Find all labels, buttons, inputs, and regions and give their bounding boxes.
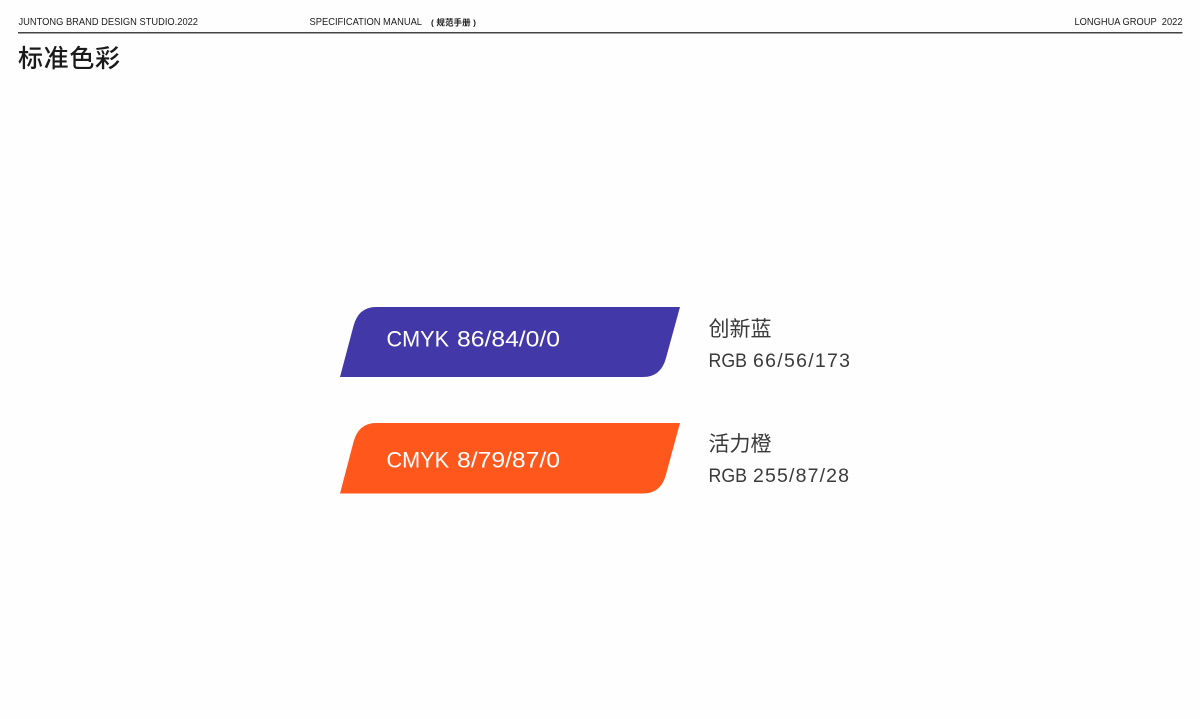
header text: studio: JUNTONG BRAND DESIGN STUDIO.2022 [18, 17, 198, 28]
title: 标准色彩 [18, 39, 120, 75]
RGB value: orange: RGB [708, 465, 747, 487]
header: top bar [18, 17, 1183, 34]
header text: manual Chinese: ( 规范手册 ) [431, 18, 476, 28]
panel: innovation blue swatch [340, 307, 680, 377]
text block: blue name and RGB [708, 318, 850, 372]
swatch shape: orange [340, 423, 680, 494]
swatch label: orange CMYK: CMYK [386, 448, 449, 472]
colour name: orange: 活力橙 [708, 433, 772, 456]
header text: group: LONGHUA GROUP 2022 [1074, 17, 1183, 28]
RGB value: orange: 255/87/28 [753, 465, 849, 487]
RGB value: blue: RGB [708, 350, 747, 372]
swatch shape: blue [340, 307, 680, 377]
colour name: blue: 创新蓝 [708, 318, 772, 341]
swatch label: blue CMYK: 86/84/0/0 [457, 326, 560, 352]
header rule [18, 32, 1182, 34]
text block: orange name and RGB [708, 433, 849, 487]
swatch label: blue CMYK: CMYK [386, 326, 449, 352]
panel: vitality orange swatch [340, 423, 680, 494]
swatch label: orange CMYK: 8/79/87/0 [457, 448, 560, 472]
RGB value: blue: 66/56/173 [753, 350, 850, 372]
header text: manual: SPECIFICATION MANUAL [310, 17, 422, 28]
